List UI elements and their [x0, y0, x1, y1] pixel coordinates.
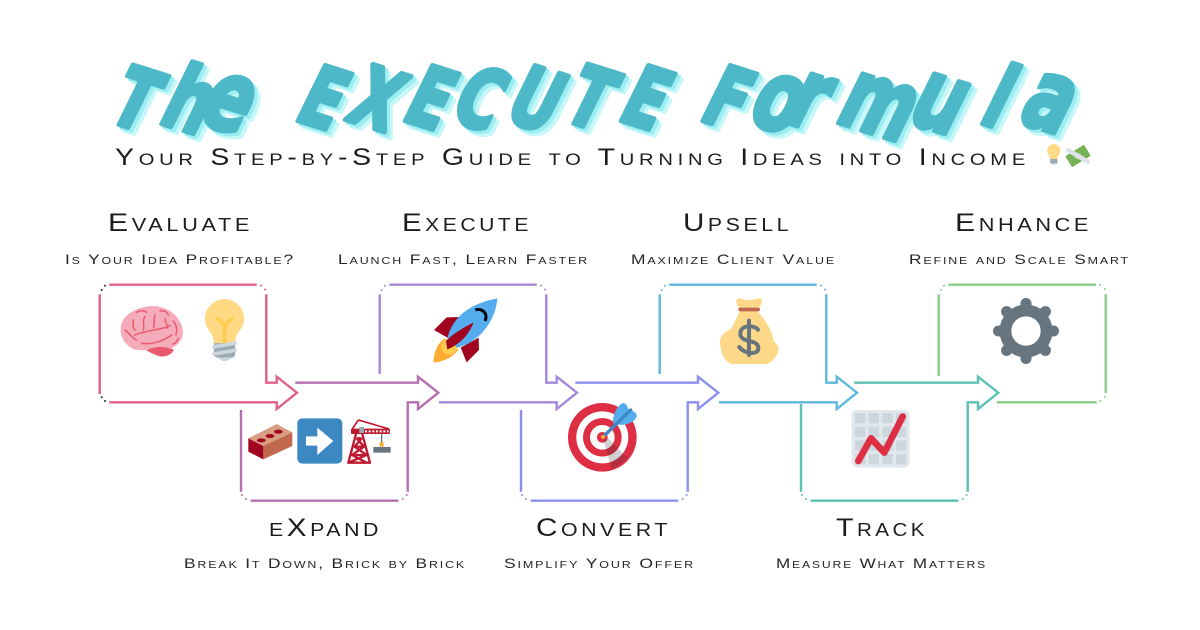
- icon: money with wings small: [1063, 141, 1093, 171]
- heading: Execute: Execute: [402, 209, 532, 237]
- icon: gear: [998, 303, 1053, 358]
- heading: Convert: Convert: [536, 514, 671, 542]
- title: EXECUTE: [279, 50, 691, 152]
- arrow frame: Evaluate: [100, 285, 297, 409]
- panel: Upsell: [631, 209, 857, 409]
- text: Simplify Your Offer: Simplify Your Offer: [504, 555, 695, 571]
- text: Maximize Client Value: Maximize Client Value: [631, 251, 836, 267]
- icon: brain: [121, 306, 183, 356]
- arrow frame: Track: [801, 377, 998, 501]
- text: Measure What Matters: Measure What Matters: [776, 555, 987, 571]
- subtitle: Your Step-by-Step Guide to Turning Ideas into Income: [115, 144, 1030, 171]
- panel: eXpand: [184, 377, 466, 571]
- icon: target with dart: [568, 403, 637, 472]
- icon: light bulb large: [205, 299, 244, 361]
- arrow frame: eXpand: [241, 377, 438, 501]
- icon: right arrow button: [297, 418, 342, 464]
- arrow frame: Convert: [521, 377, 718, 501]
- panel: Track: [776, 377, 998, 571]
- title: The: [90, 38, 284, 157]
- panel: Execute: [338, 209, 589, 409]
- icon: money bag: [720, 298, 779, 364]
- icon: chart increasing: [852, 410, 910, 468]
- panel: Convert: [504, 377, 718, 571]
- heading: Upsell: Upsell: [683, 209, 792, 237]
- title: Formula: [680, 38, 1105, 165]
- icon: light bulb small: [1047, 144, 1060, 165]
- text: Refine and Scale Smart: Refine and Scale Smart: [909, 251, 1130, 267]
- heading: Track: Track: [836, 514, 928, 542]
- title: [90, 38, 1105, 165]
- icon: brick: [248, 424, 292, 459]
- text: Launch Fast, Learn Faster: Launch Fast, Learn Faster: [338, 251, 589, 267]
- arrow frame: Execute: [380, 285, 577, 409]
- text: Is Your Idea Profitable?: Is Your Idea Profitable?: [65, 251, 295, 267]
- icon: construction crane: [347, 420, 391, 463]
- heading: eXpand: eXpand: [269, 514, 382, 542]
- frame: Enhance: [939, 285, 1106, 402]
- arrow frame: Upsell: [660, 285, 857, 409]
- panel: Evaluate: [65, 209, 297, 409]
- text: Break It Down, Brick by Brick: Break It Down, Brick by Brick: [184, 555, 466, 571]
- heading: Evaluate: Evaluate: [108, 209, 253, 237]
- heading: Enhance: Enhance: [955, 209, 1092, 237]
- panel: Enhance: [909, 209, 1130, 402]
- icon: rocket: [433, 298, 497, 362]
